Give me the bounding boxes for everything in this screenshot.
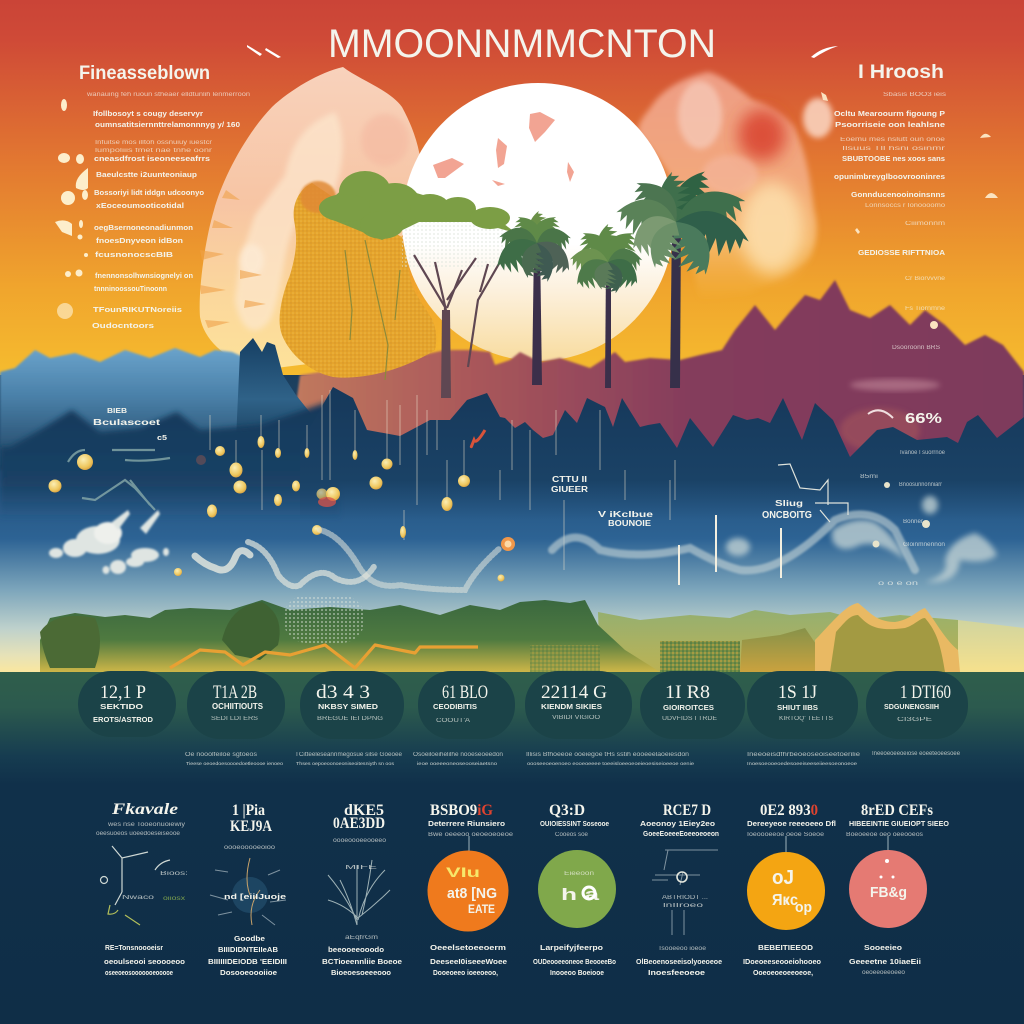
stat pill 4: CEODIBITIS — [433, 704, 477, 711]
pill captions: Osoeiloeihelilhe nooeseoeedon — [413, 752, 503, 758]
heading: 8rED CEFs — [861, 802, 933, 819]
stat pill 5: 22114 G — [541, 682, 607, 703]
right clouds — [726, 496, 997, 582]
column 2: KEJ9A — [230, 818, 272, 835]
pill captions: Thses oepoeoonoeoniseoitesniyth sn oos — [296, 761, 395, 766]
heading: 1 |Pia — [232, 802, 265, 819]
pill captions: ieoe ooeeeoneoseooseiaetsno — [417, 761, 498, 766]
column 6: OlBeoenoseeisolyoeoeoe — [636, 959, 722, 966]
line diagram: lnIIroeo — [663, 903, 704, 909]
column 4 — [428, 802, 514, 977]
mid label centre 1 — [551, 475, 588, 494]
rain: drops and threads — [48, 390, 675, 582]
column 5 — [533, 802, 616, 977]
pill captions: TCitteeleseannmegosue silse Goeoee — [295, 752, 403, 758]
heading: dKE5 — [344, 802, 384, 819]
panel: left text list: lumpoliiis fmet nae tnhe oonr — [95, 148, 212, 154]
caption: RE=Tonsnoooeisr — [105, 945, 163, 952]
panel: left text list: fnoesDnyveon idBon — [96, 238, 183, 245]
panel: left text list: tnnninoossouTinoonn — [94, 286, 167, 293]
panel: right text list: Dsooroonn BRS — [892, 345, 940, 351]
panel: left text list: Ifollbosoyt s cougy deservyr — [93, 111, 203, 118]
stat pill 8 — [884, 682, 951, 723]
panel: right text list: SBUBTOOBE nes xoos sans — [842, 156, 945, 163]
stat pill 2 — [211, 682, 264, 722]
column 8: Boeoeeoe oeo oeeooeos — [846, 832, 923, 838]
panel: left text list: Bossoriyi lidt iddgn udcoonyo — [94, 190, 204, 197]
mid label left: Bculascoet — [93, 418, 161, 427]
column 4: Dooeoeeo ioeeoeoo, — [433, 970, 498, 977]
left list icons — [55, 99, 88, 319]
stat pill 4 — [433, 682, 488, 724]
stat pill 2: SEDI LDI ERS — [211, 716, 258, 722]
stat pill 3: NKBSY SIMED — [318, 704, 378, 711]
stat pill 5: VIBIDI VIGIOO — [552, 715, 600, 721]
column 3: oooeoooeeooeeo — [333, 838, 387, 844]
column 4: Deterrere Riunsiero — [428, 821, 505, 828]
right side labels: Ivanoe I suorrnoe — [900, 450, 946, 456]
column 7 — [743, 802, 836, 977]
right side labels: Gloinmnennon — [903, 542, 945, 548]
pill captions: Ineeoeisdfhrbeoeoseoiseetoerilie — [747, 752, 861, 758]
pink circle — [849, 836, 927, 928]
stat pill 1: SEKTIDO — [100, 704, 144, 711]
line diagram — [652, 850, 718, 935]
stat pill 1: EROTS/ASTROD — [93, 717, 153, 724]
stat pill 6 — [662, 682, 717, 722]
stat pill 7: SHIUT IIBS — [777, 705, 818, 712]
caption: aEqfrGm — [345, 935, 378, 941]
heading: RCE7 D — [663, 802, 711, 819]
right side labels: Bonner — [903, 519, 923, 525]
dark ridge: left fade — [0, 400, 340, 520]
stat pill 3 — [316, 682, 383, 722]
stat pill 7: 1S 1J — [778, 682, 817, 703]
panel: left text list: xEoceoumooticotidal — [96, 203, 184, 210]
stat pill 8: 1 DTI60 — [900, 682, 951, 703]
orange trend line — [170, 645, 478, 668]
column 2: Dosooeoooiioe — [220, 970, 277, 977]
process diagram: oiiosx — [163, 896, 185, 902]
tree branches in yellow tree — [345, 240, 400, 380]
column 5: Inooeoo Boeiooe — [550, 970, 604, 977]
panel: right text list: Fs Tiornmne — [905, 306, 946, 312]
heading: Fkavale — [111, 801, 178, 818]
process diagram: Bioos: — [160, 871, 189, 877]
green circle: h а — [561, 885, 600, 904]
column 2 — [208, 802, 287, 977]
column 8: HIBEEINTIE GIUEIOPT SIEEO — [849, 821, 950, 828]
caption: Oeeelsetoeeoerm — [430, 945, 506, 952]
mid ridge: maroon mountains — [290, 280, 1024, 470]
panel: right text list: Psoorriseie oon leahlsne — [835, 122, 945, 129]
panel: left text list: fnennonsolhwnsiognelyi on — [95, 273, 193, 280]
column 3 — [322, 802, 402, 977]
column 6: Inoesfeeoeoe — [648, 970, 705, 977]
right pink cloud — [638, 72, 833, 300]
panel: left text list: wanauing feh ruoun stheaer elldtunlih lenmerroon — [86, 92, 250, 98]
column 1: oseeoeosooooooeooooe — [105, 970, 173, 977]
white vertical gauges — [679, 515, 781, 585]
left heading: Fineasseblown — [79, 63, 210, 84]
line diagram: ABTRIODT ... — [662, 895, 708, 901]
stat pill 2: OCHIITIOUTS — [212, 702, 264, 711]
green circle — [538, 850, 616, 928]
caption: Larpeifyjfeerpo — [540, 945, 603, 952]
column 6 — [636, 802, 722, 977]
pill captions: Illisis Bfhoeeoe ooeiegoe tHs sstih eooeeelaoeiesdon — [526, 752, 689, 758]
root tree diagram — [328, 860, 390, 925]
column 7: Ioeoooeeoe oeoe Soeoe — [747, 832, 825, 838]
mid label left: c5 — [157, 435, 167, 442]
left ridge: blue mountains — [0, 338, 325, 470]
column 3: Bioeoesoeeeooo — [331, 970, 391, 977]
panel: left text list: cneasdfrost iseoneeseafrrs — [94, 156, 210, 163]
panel: left text list: Baeulcstte i2uunteoniaup — [96, 172, 197, 179]
panel: left text list: Oudocntoors — [92, 323, 154, 330]
panel: right text list: Eoemu mes nslutt oun onoe — [840, 137, 946, 143]
right side labels: o o e on — [878, 581, 918, 587]
panel: left text list — [55, 63, 250, 330]
mid label centre 1: GIUEER — [551, 485, 588, 494]
column 3: 0AE3DD — [333, 815, 385, 832]
wind wave trail — [195, 514, 915, 590]
yellow tree — [280, 183, 436, 378]
column 5: OUIOIESSINT Soseooe — [540, 821, 609, 828]
lower landscape: left forest — [40, 595, 660, 672]
right side labels: 85mi — [860, 474, 878, 480]
column 2: BIIIDIDNTEIIeAB — [218, 947, 278, 954]
column 6: GoeeEoeeeEoeeoeoeon — [643, 831, 719, 838]
mid label centre 2 — [598, 510, 654, 528]
panel: right text list: Ocltu Mearoourm figoung P — [834, 111, 945, 118]
pill captions — [185, 751, 961, 766]
orange circle: VIu — [446, 864, 480, 880]
radial diagram — [210, 858, 286, 925]
dark navy mountain ridge — [300, 387, 1024, 520]
column 1: oeoulseooi seoooeoo — [104, 959, 185, 966]
stat pill 3: BREGUE IEI DPNG — [317, 716, 383, 722]
background: warm sky — [0, 0, 1024, 400]
pill captions: oooseeoeoenoeo eooeoeeee toeeisloeeoeoeieoesiseioeeoe oenie — [527, 761, 695, 766]
percentage callout: 66% — [905, 410, 942, 427]
column 2: BIIIIIIDEIODB 'EEIDIII — [208, 959, 287, 966]
panel: left text list: oegBsernoneonadiunmon — [94, 225, 193, 232]
mid label centre 3: Sliug — [775, 499, 803, 508]
decorative title flourishes — [247, 45, 838, 58]
panel: right text list: Sbasis BOO3 ieis — [883, 92, 946, 98]
column 1 — [96, 801, 189, 977]
column 4: Bwe oeeeoo oeoeoeoeoe — [428, 832, 514, 838]
column 7: IDoeoeeseooeiohooeo — [743, 959, 821, 966]
palm tree 1 — [490, 211, 577, 385]
sun cloud fragments — [433, 112, 574, 186]
caption: Goodbe — [234, 936, 265, 943]
amber circle: op — [795, 899, 812, 916]
panel: left text list: oumnsatitsiernnttrelamonnnyg y/ 160 — [95, 122, 240, 129]
pink circle: FB&g — [870, 884, 907, 901]
caption: Sooeeieo — [864, 945, 902, 952]
stat pill 7 — [777, 682, 833, 722]
column 5: OUDeooeeoneoe BeooeeBo — [533, 959, 616, 966]
heading: BSBO9iG — [430, 802, 494, 819]
title: MMOONNMMCNTON — [328, 22, 716, 66]
right heading: I Hroosh — [858, 62, 944, 83]
column 8 — [846, 802, 950, 976]
orange circle: EATE — [468, 902, 495, 916]
amber circle: oJ — [772, 867, 794, 889]
stat pill 7: KIRTOQ' TEETTS — [779, 716, 833, 722]
column 4: DeeseeI0iseeeWoee — [430, 959, 507, 966]
background: monsoon air — [0, 375, 1024, 673]
background: dark footer — [0, 672, 1024, 1024]
stat pill 6: 1I R8 — [665, 682, 710, 703]
stat pill 8: SDGUNENGSIIH — [884, 704, 939, 711]
heading: Q3:D — [549, 802, 585, 819]
lower landscape: right hills — [598, 603, 960, 672]
palm tree 3 — [612, 164, 753, 388]
panel: left text list: fcusnonocscBIB — [95, 252, 173, 259]
panel: right text list: GEDIOSSE RIFTTNIOA — [858, 250, 945, 257]
panel: right text list: Gonnducenooinoinsnns — [851, 192, 945, 199]
column 6: Aoeonoy 1Eiey2eo — [640, 821, 715, 828]
process diagram: Nwaco — [122, 895, 155, 901]
stat pill 1 — [93, 682, 153, 724]
stat pill 8: CI3GPE — [897, 717, 932, 723]
stat pill 4: COOUT'A — [436, 718, 470, 724]
pill captions: Inoesoeooeoedesoeeiseeseiieesoeonoeoe — [747, 761, 858, 766]
panel: left text list: Infuitse mos illtoh ossnuiuy iuestcr — [95, 140, 212, 146]
stat pill 1: 12,1 P — [100, 682, 146, 703]
orange tree crown edge — [300, 181, 336, 213]
panel: right text list: Lonnsoccs r Ionoooomo — [865, 203, 946, 209]
orange circle — [428, 836, 508, 932]
stat pill 6: UDVFIDS I TRDE — [662, 716, 717, 722]
percentage callout — [868, 410, 942, 427]
mid label left — [93, 408, 167, 442]
radial diagram: nd [eiiIJuoje — [224, 894, 286, 901]
left peach cloud — [200, 67, 422, 370]
pill captions: Oe nooolfeiloe sgtoeos — [185, 752, 257, 758]
panel: right text list — [821, 62, 998, 351]
panel: right text list: Ilsuus Tll hsni osinmr — [842, 146, 945, 152]
mid label centre 2: BOUNOIE — [608, 519, 652, 528]
column 1: oeesuoeos uoeedoeseiseooe — [96, 831, 181, 837]
stat pill 2: T1A 2B — [213, 682, 257, 703]
stat pill 5: KIENDM SIKIES — [541, 704, 602, 711]
green circle: Eieeoon — [564, 871, 594, 877]
panel: left text list: TFounRIKUTNoreiis — [93, 307, 182, 314]
stat pill 6: GIOIROITCES — [663, 705, 714, 712]
palm tree 2 — [568, 223, 644, 388]
sun disc — [402, 83, 674, 361]
left clouds — [49, 510, 169, 574]
stat pill 5 — [541, 682, 607, 721]
column 3: BCTioeennliie Boeoe — [322, 959, 402, 966]
pill captions: Tieese oeoedoesoooedoetleoooe ienoeo — [186, 761, 284, 766]
wisps of wind — [68, 450, 170, 510]
acacia tree — [319, 171, 516, 398]
column 8: oeoeeoeeoeeo — [862, 970, 906, 976]
orange circle: at8 [NG — [447, 885, 497, 902]
caption: BEBEITIEEOD — [758, 945, 813, 952]
mid label centre 2: V iKclbue — [598, 510, 654, 519]
stat pill 4: 61 BLO — [442, 682, 488, 703]
lower landscape: right pale hills — [860, 615, 1024, 672]
mid label centre 1: CTTU II — [552, 475, 587, 484]
amber circle — [747, 836, 825, 930]
panel: right text list: Cr Biorvvvne — [905, 276, 946, 282]
mid label centre 3 — [762, 464, 848, 522]
right side labels — [860, 450, 946, 587]
process diagram — [100, 846, 189, 925]
panel: right text list: opunimbreyglboovrooninres — [834, 174, 945, 181]
heading: 0E2 8930 — [760, 802, 818, 819]
mid label centre 3: ONCBOITG — [762, 510, 812, 521]
right list icons — [821, 92, 998, 329]
amber circle: Яҝc — [772, 892, 798, 909]
root tree diagram: MIFE — [345, 865, 377, 871]
column 1: wes nse Tooeonuoiewiy — [107, 822, 185, 828]
column 7: Dereeyeoe reeeoeeo Dfl — [747, 821, 836, 828]
column 5: Cooeos soe — [555, 832, 589, 838]
right side labels: Bnoosunnonniarr — [899, 482, 942, 488]
column 8: Geeeetne 10iaeEii — [849, 959, 921, 966]
mid label left: BIEB — [107, 408, 127, 415]
caption: Tsooeeoo ioeoe — [658, 946, 707, 952]
stat pills — [78, 671, 968, 739]
column 7: Ooeoeoeoeeoeoe, — [753, 970, 813, 977]
stat pill 3: d3 4 3 — [316, 682, 370, 703]
pill captions: Ineeoeoeeoeiose eoeeteoeesoee — [872, 751, 961, 757]
column 3: beeooeeooodo — [328, 947, 384, 954]
column 2: oooeooooeoioo — [224, 845, 276, 851]
panel: right text list: Ciiimonnm — [905, 221, 945, 227]
